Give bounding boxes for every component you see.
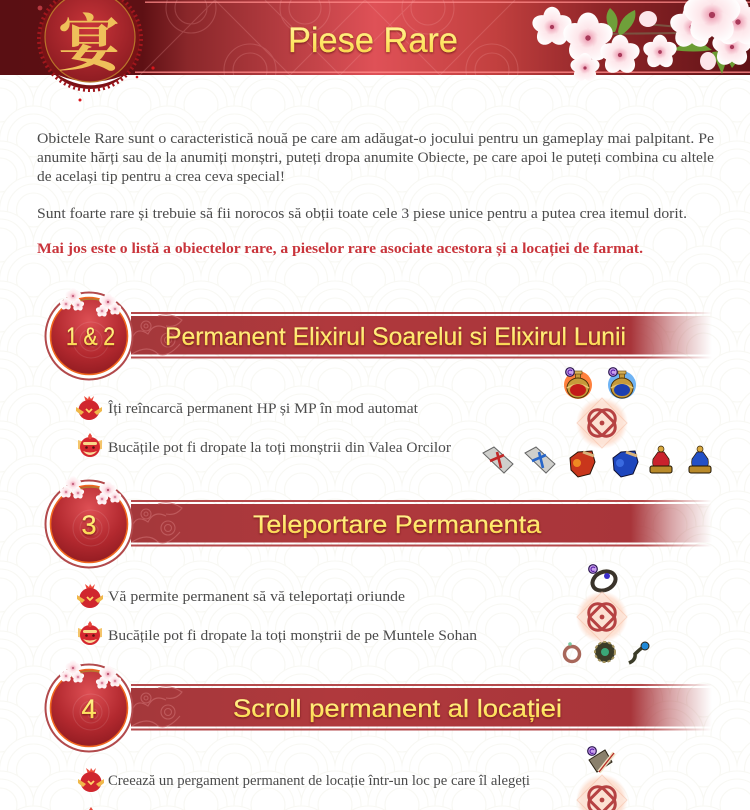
bullet: drop location (78, 621, 478, 645)
bullet: teleport anywhere: Vă permite permanent să vă teleportați oriunde (108, 589, 405, 605)
section 1 heading: Permanent Elixirul Soarelui si Elixirul Lunii (165, 323, 626, 351)
cherry blossoms (530, 0, 750, 84)
icon: red elixir (564, 368, 592, 399)
icon: red scroll piece (483, 447, 513, 473)
bullet: create scroll (78, 768, 530, 792)
bullet: auto recharge: Îți reîncarcă permanent HP și MP în mod automat (108, 400, 418, 417)
intro text: Obictele Rare sunt o caracteristică nouă pe care am adăugat-o jocului pentru un gameplay mai palpitant. Pe (37, 131, 714, 147)
icon: combine symbol (576, 591, 628, 643)
seal with calligraphy (38, 0, 155, 102)
bullet: drop location: Bucățile pot fi dropate la toți monștrii din Valea Orcilor (108, 440, 451, 456)
icon: copper ring (564, 642, 580, 662)
header ribbon (0, 0, 750, 75)
icon: combine symbol (576, 397, 628, 449)
section 3 banner (131, 684, 712, 730)
icon: lion cut off at page bottom (79, 807, 103, 810)
icon: blue elixir (608, 368, 636, 399)
intro text: Mai jos este o listă a obiectelor rare, a pieselor rare asociate acestora și a locației de farmat. (37, 241, 643, 257)
icon: red jar (650, 446, 672, 473)
icon: location scroll (588, 747, 614, 772)
section 2 heading: Teleportare Permanenta (253, 511, 541, 539)
icon: gem medallion (595, 642, 615, 662)
icon: teleport ring (589, 565, 619, 594)
intro text: de același tip pentru a crea ceva special! (37, 169, 285, 185)
section 2 banner (131, 500, 712, 546)
intro text (37, 131, 714, 257)
bullet: create scroll: Creează un pergament permanent de locație într-un loc pe care îl alegeți (108, 773, 530, 789)
section 1: elixirs (46, 288, 712, 477)
icon: blue jar (689, 446, 711, 473)
bullet: teleport anywhere (77, 584, 405, 608)
icon: combine symbol (576, 774, 628, 810)
section 3 number badge: 4 (81, 694, 97, 724)
section 1 number badge: 1 & 2 (66, 323, 115, 351)
section 2: teleport (46, 476, 712, 663)
icon: red fragment (570, 451, 595, 477)
bullet: drop location: Bucățile pot fi dropate la toți monștrii de pe Muntele Sohan (108, 628, 478, 644)
section 2 number badge (46, 476, 132, 568)
section 3: location scroll (46, 660, 712, 810)
bullet: drop location (78, 433, 451, 457)
bullet: auto recharge (76, 396, 418, 420)
title: Piese Rare (288, 21, 458, 60)
section 2 number badge: 3 (81, 510, 97, 540)
intro text: Sunt foarte rare și trebuie să fii norocos să obții toate cele 3 piese unice pentru a putea crea itemul dorit. (37, 206, 687, 222)
icon: staff piece (629, 642, 649, 663)
intro text: anumite hărți sau de la anumiți monștri, puteți dropa anumite Obiecte, pe care apoi le puteți combina cu altele (37, 150, 714, 166)
icon: blue scroll piece (525, 447, 555, 473)
section 3 number badge (46, 660, 132, 752)
header banner (0, 0, 750, 102)
section 1 banner (131, 312, 712, 358)
section 3 heading: Scroll permanent al locației (233, 695, 562, 723)
icon: blue fragment (613, 451, 638, 477)
section 1 number badge (46, 288, 132, 380)
